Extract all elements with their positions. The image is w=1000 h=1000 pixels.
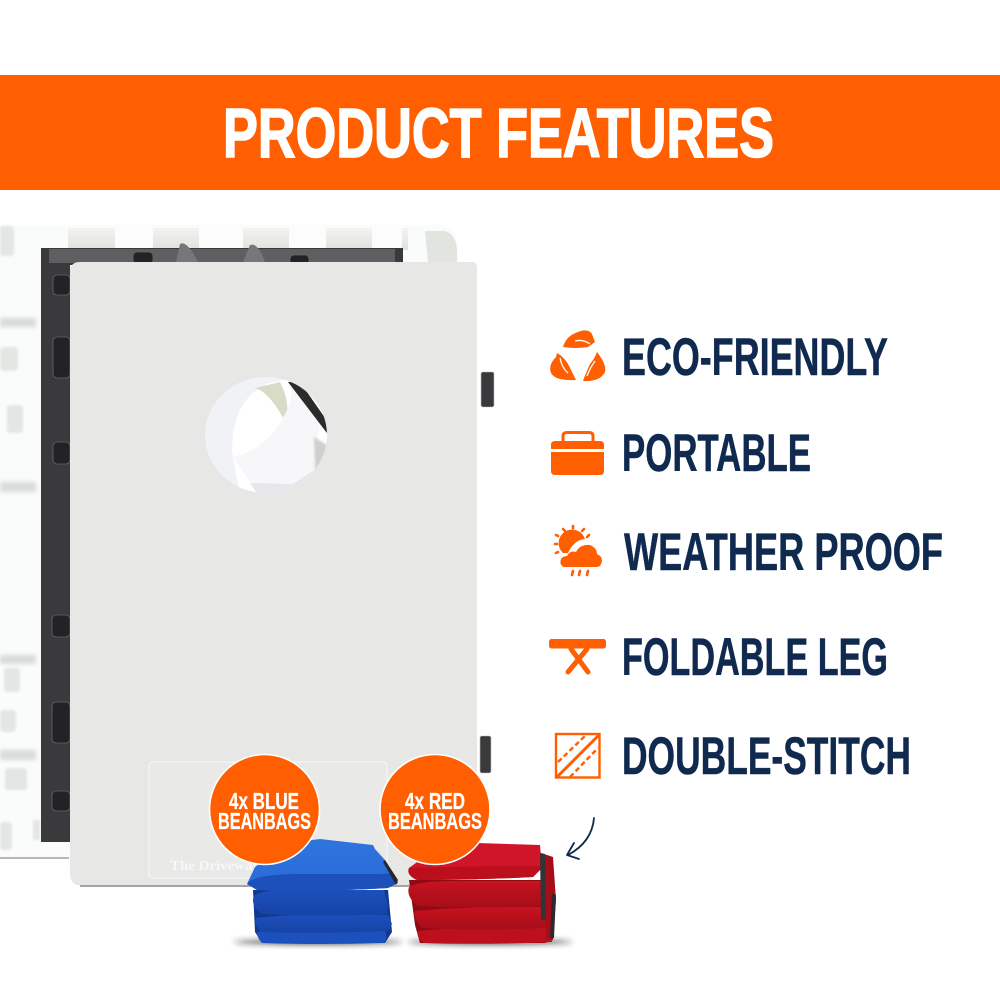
board embossed logo plate [149,762,387,878]
callout: 4x red beanbags: 4x RED [405,788,465,814]
feature: double-stitch [556,727,911,786]
callout: 4x blue beanbags [210,754,320,864]
feature: eco-friendly [550,328,888,387]
board hole [205,377,330,497]
arrow to beanbags [567,818,594,859]
title: PRODUCT FEATURES [223,94,774,172]
icon: sun and rain cloud [555,526,602,575]
callout: 4x red beanbags: BEANBAGS [388,808,482,834]
red beanbag stack [408,843,572,944]
board front face [70,262,480,887]
header banner [0,75,1000,190]
board embossed logo plate: The Driveway [170,859,260,874]
feature: foldable leg [549,628,888,687]
board dark hinge rail [41,243,403,842]
icon: three leaves [550,330,605,381]
feature: portable [551,424,811,483]
feature: weather proof [555,523,943,582]
icon: stitched square [556,734,600,778]
product photo: cornhole board [0,225,494,887]
callout: 4x blue beanbags: 4x BLUE [229,788,299,814]
board back frame [0,225,458,859]
blue beanbag stack [234,839,402,944]
callout: 4x red beanbags [380,754,490,864]
label: portable: PORTABLE [622,424,811,483]
icon: folding table [549,639,606,672]
icon: carrying case [551,432,604,475]
board side latches [480,372,494,773]
callout: 4x blue beanbags: BEANBAGS [218,808,311,834]
